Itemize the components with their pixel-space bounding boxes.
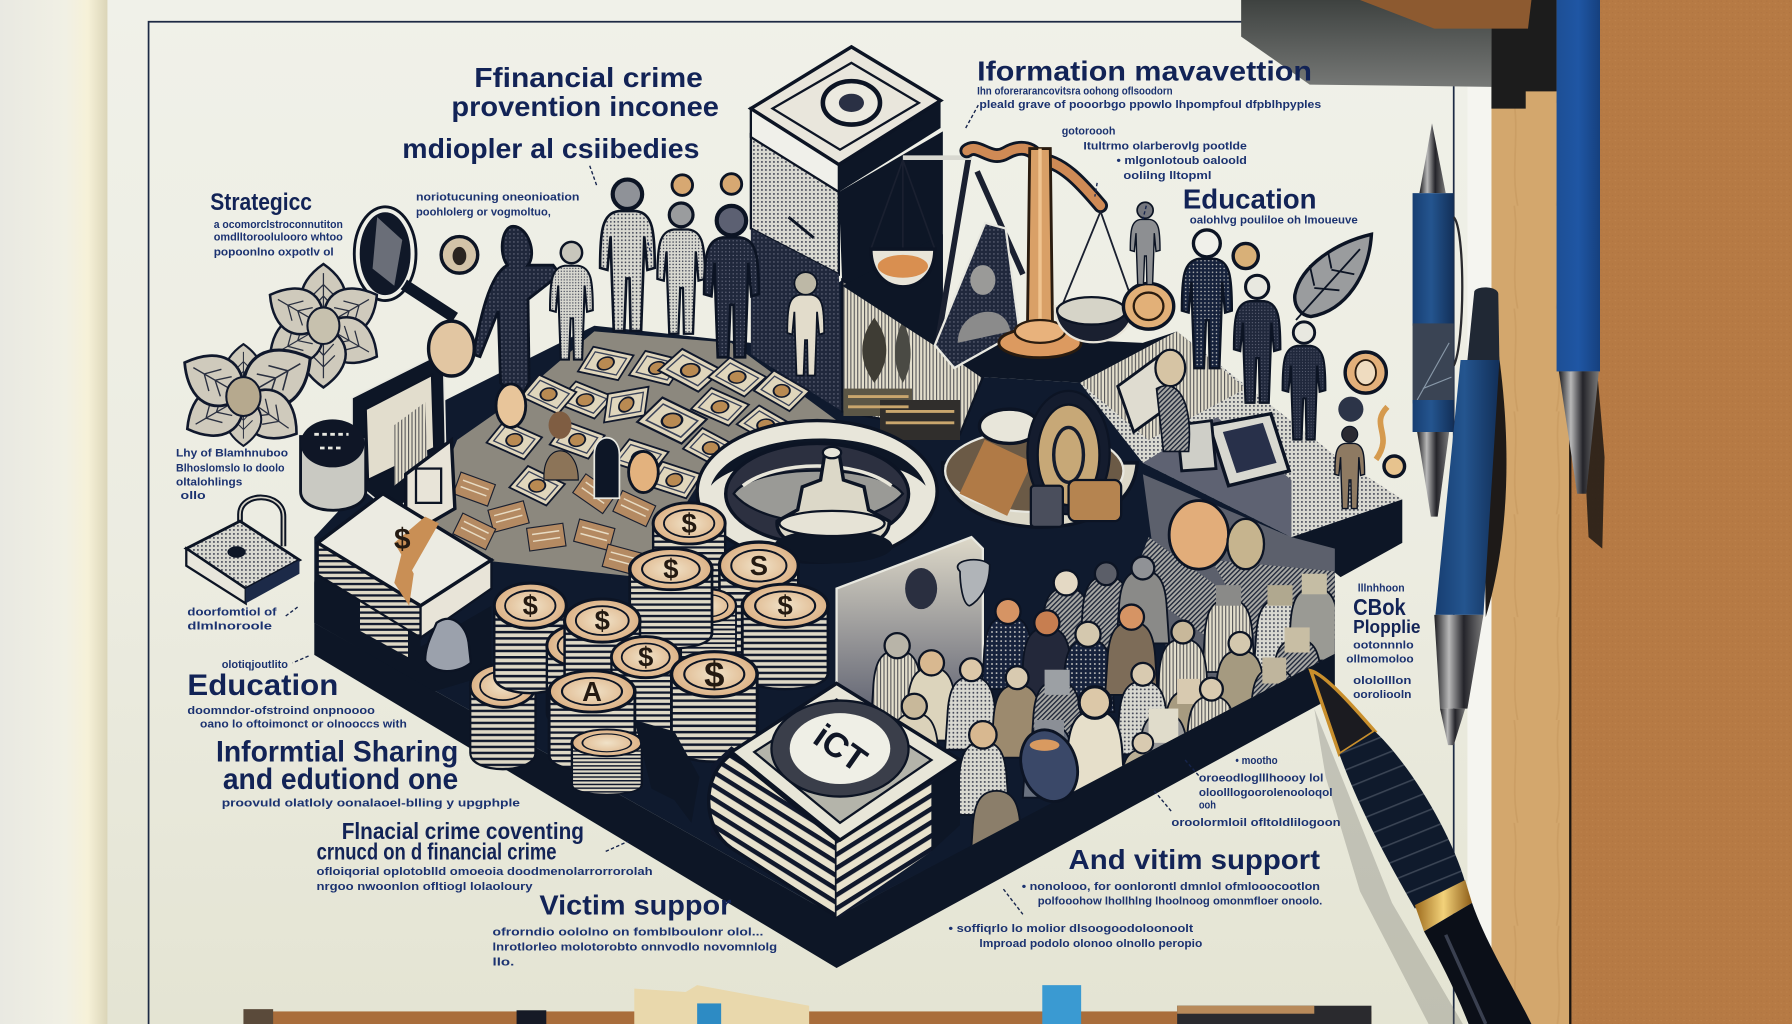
striped panel with plants and books [842, 280, 983, 440]
dark scales backdrop [842, 154, 1177, 383]
text block: informal sharing [216, 736, 520, 809]
dashed leader lines [286, 105, 1200, 914]
cone weight [777, 451, 889, 550]
coin stacks: $ [663, 554, 678, 585]
pen: tall blue at top [1557, 0, 1605, 549]
text block: left under flower: oltalohlings [176, 476, 242, 488]
text block: education left: doomndor-ofstroind onpnoooo [187, 705, 375, 717]
text block: education left: Education [187, 669, 338, 702]
text block: education left [187, 659, 407, 731]
handbag [1069, 480, 1121, 521]
coin stacks: $ [778, 590, 793, 621]
figure: stippled adult [657, 203, 705, 334]
money box top [751, 47, 941, 165]
scales base [999, 328, 1081, 358]
text block: informal sharing: Informtial Sharing [216, 736, 458, 768]
text block: right column people: ootonnnlo [1353, 640, 1414, 652]
text block: and victim support [949, 844, 1322, 950]
text block: strategic [210, 189, 343, 259]
text block: education left: oano lo oftoimonct or olnooccs with [200, 719, 407, 731]
large coins on wall [1169, 501, 1229, 569]
text block: scale notes: gotoroooh [1062, 125, 1115, 137]
figure: navy person [1234, 275, 1280, 403]
text block: top note [416, 192, 579, 219]
icon: flower top [259, 264, 388, 387]
text block: financial crime preventing: ofloiqorial oplotoblld omoeoia doodmenolarrorrorolah [317, 866, 653, 878]
title: financial crime prevention [402, 62, 719, 164]
text block: education right: oalohlvg pouliloe oh lmoueuve [1190, 215, 1358, 227]
silhouettes at front [634, 720, 699, 823]
slanted hatched wall [1143, 474, 1335, 731]
text block: right column people: ollmomoloo [1346, 653, 1414, 665]
title: financial crime prevention: provention inconee [451, 91, 719, 122]
coin stack [549, 671, 635, 771]
crowd panel [837, 474, 1341, 864]
title: financial crime prevention: mdiopler al csiibedies [402, 133, 699, 164]
text block: left under flower: Blhoslomslo Io doolo [176, 463, 285, 475]
column stippled side [751, 135, 839, 274]
coin stacks: S [750, 550, 768, 581]
coin stacks: $ [638, 642, 653, 673]
blue emblem shield [1012, 722, 1087, 809]
coin stack [681, 589, 736, 669]
coin stack [565, 599, 640, 704]
isometric scene base [314, 280, 1335, 968]
coin stack [742, 584, 828, 689]
central dial ring [697, 421, 937, 563]
money stack left [314, 494, 491, 691]
figure: tall dark figure [473, 226, 560, 393]
figure: brown person [1335, 426, 1365, 509]
coin stack back [653, 503, 725, 603]
icon: coins above figures [672, 174, 742, 195]
figures group with magnifier at top left [473, 174, 759, 393]
figure: dark adult [704, 206, 759, 357]
right pan [1057, 211, 1138, 318]
crowd people [871, 557, 1341, 864]
left pan [871, 160, 935, 249]
coin stack [547, 624, 619, 729]
text block: strategic: Strategicc [210, 189, 312, 216]
text block: lock caption: doorfomtiol of [187, 607, 277, 619]
tall column with money box [751, 47, 943, 411]
small vase [425, 619, 471, 671]
bottom desk strip [243, 1006, 1371, 1024]
text block: top note: noriotucuning oneonioation [416, 192, 579, 204]
text block: financial crime preventing: nrgoo nwoonlon ofltiogl lolaoloury [317, 881, 533, 893]
title: financial crime prevention: Ffinancial crime [474, 62, 703, 93]
text block: information: Iformation mavavettion [977, 55, 1312, 86]
text block: left under flower: Lhy of Blamhnuboo [176, 448, 288, 460]
text block: scale notes: • mlgonlotoub oaloold [1117, 155, 1247, 167]
text block: right column people: ooroliooln [1353, 689, 1411, 701]
text block: left under flower: ollo [181, 490, 206, 502]
icon: flower bottom [172, 334, 324, 453]
coin stack [719, 542, 798, 657]
text block: strategic: popoonlno oxpotlv ol [214, 247, 334, 259]
scales beam [903, 156, 971, 160]
pen: large black and gold pen [1311, 671, 1531, 1024]
text block: education left: olotiqjoutlito [222, 659, 288, 671]
icon: leaf [1295, 234, 1371, 320]
coin stack front [572, 729, 642, 794]
text block: financial crime preventing [317, 818, 653, 893]
coin stack [671, 652, 757, 762]
text block: informal sharing: proovuld olatloly oonalaoel-blling y upgphple [222, 797, 520, 809]
sticky note and blue tapes [634, 985, 1081, 1024]
text block: strategic: a ocomorclstroconnutiton [214, 219, 343, 231]
coin stacks: $ [595, 605, 610, 636]
scales of justice [871, 148, 1138, 358]
figure: grey person [1130, 202, 1160, 285]
scales post [1027, 149, 1053, 331]
text block: left under flower [176, 448, 288, 502]
coin stacks: A [582, 676, 602, 707]
icon: magnifying glass [354, 207, 455, 318]
wood block at top [1360, 0, 1531, 29]
text block: victim support left [493, 890, 777, 968]
bills pile [423, 331, 840, 577]
text block: and victim support: • soffiqrlo lo molior dlsoogoodoloonoolt [949, 923, 1193, 935]
pen: second blue pen [1434, 287, 1506, 745]
text block: right column people [1346, 583, 1421, 701]
text block: and victim support: And vitim support [1069, 844, 1320, 875]
column dark side [839, 131, 943, 331]
text block: financial crime preventing: Flnacial crime coventing [342, 818, 584, 844]
platform dark surface [314, 280, 1335, 917]
coin stack [630, 549, 712, 649]
wood strip [1489, 0, 1569, 1024]
text block: right column people: CBok [1353, 594, 1406, 620]
coin stack [470, 664, 535, 769]
cast shadow at top [1241, 0, 1557, 109]
coin pot with emblem [943, 391, 1137, 527]
text block: right column people: lllnhhoon [1358, 583, 1405, 595]
coin stacks [470, 503, 828, 823]
desk background: cork [1486, 0, 1792, 1024]
back wall [837, 537, 983, 731]
text block: and victim support: • nonolooo, for oonlorontl dmnlol ofmlooocootlon [1022, 881, 1320, 893]
text block: right column people: olololllon [1353, 675, 1411, 687]
text block: scale notes: Itultrmo olarberovlg pootlde [1083, 140, 1247, 152]
left page [0, 0, 110, 1024]
right raised platform [1080, 331, 1402, 577]
text block: notes above victim support [1171, 755, 1341, 829]
text block: victim support left: lnrotlorleo molotorobto onnvodlo novomnlolg [493, 941, 777, 953]
text block: victim support left: Victim suppor [539, 890, 732, 921]
text block: and victim support: polfooohow lhollhlng lhoolnoog omonmfloer onoolo. [1038, 896, 1322, 908]
main paper sheet [107, 0, 1491, 1024]
text block: information [977, 55, 1321, 111]
text block: lock caption: dlmlnoroole [187, 620, 272, 632]
coin stack [611, 637, 680, 737]
coin [429, 321, 474, 376]
text block: victim support left: ofrorndio oololno on fomblboulonr olol... [493, 927, 763, 939]
text block: notes above victim support: • mootho [1235, 755, 1278, 767]
icon: small coin near magnifier [441, 237, 478, 273]
monitor [352, 352, 446, 514]
small seated person [549, 411, 571, 439]
text block: strategic: omdlltoroolulooro whtoo [214, 232, 343, 244]
figure: navy person 2 [1283, 322, 1325, 440]
large book with emblem [709, 683, 960, 918]
person holding document [1118, 354, 1175, 432]
text block: scale notes [1062, 125, 1247, 182]
divider line between wood and cork [1569, 0, 1571, 1024]
pen: left blue pen [1413, 123, 1462, 517]
text block: right column people: Plopplie [1353, 616, 1421, 637]
paper right edge highlight [1467, 29, 1491, 1024]
coin stacks: $ [523, 590, 538, 621]
text block: education right [1183, 183, 1358, 227]
text block: top note: poohlolerg or vogmoltuo, [416, 207, 551, 219]
black platform sides [314, 623, 1335, 968]
text block: notes above victim support: oloolllogoorolenooloqol [1199, 787, 1333, 799]
money box side [751, 109, 839, 192]
coin stack [494, 583, 566, 693]
text block: financial crime preventing: crnucd on d financial crime [317, 838, 557, 864]
dial cylinder [301, 437, 366, 510]
text block: notes above victim support: oroeodloglllhoooy lol [1199, 772, 1323, 784]
coin stacks: $ [682, 508, 697, 539]
desk with monitors [1209, 414, 1289, 486]
text block: information: Ihn oforerarancovitsra oohong oflsoodorn [977, 85, 1173, 97]
figure: robed person [1182, 230, 1232, 368]
figure: child figure [550, 242, 593, 360]
money stack left: $ [394, 523, 411, 556]
text block: notes above victim support: oroolormloil ofltoldlilogoon [1171, 817, 1341, 829]
text block: scale notes: oolilng lltopml [1123, 170, 1211, 182]
text block: education right: Education [1183, 183, 1317, 214]
text block: lock caption [187, 607, 277, 632]
icon: small coins right [1233, 243, 1405, 477]
thin triangular arm [937, 154, 1023, 345]
text block: victim support left: llo. [493, 956, 514, 968]
standing figures on right [1130, 202, 1365, 509]
text block: and victim support: lmproad podolo olonoo olnollo peropio [979, 938, 1202, 950]
figure: white robed adult [600, 180, 655, 331]
text block: notes above victim support: ooh [1199, 800, 1216, 812]
column lower halftone side [751, 229, 842, 411]
large book with emblem: iCT [806, 717, 874, 780]
small standing figure by column [787, 272, 824, 376]
coin stacks: $ [704, 654, 724, 695]
paper page frame [149, 22, 1454, 1024]
text block: informal sharing: and edutiond one [223, 763, 458, 796]
seated figure panel [935, 223, 1019, 368]
icon: padlock [186, 497, 299, 603]
devices on the left [301, 321, 658, 537]
text block: information: pleald grave of pooorbgo ppowlo lhpompfoul dfpblhpyples [979, 99, 1321, 111]
scale coin [1123, 283, 1174, 329]
